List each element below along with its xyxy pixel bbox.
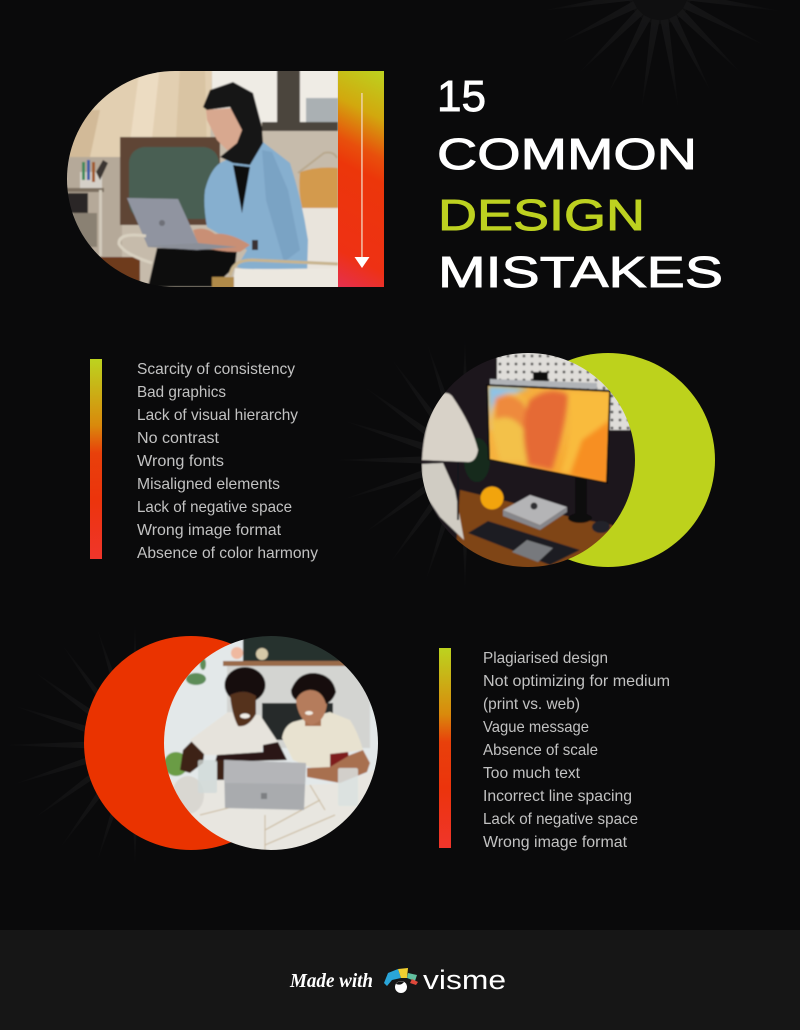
gradient bar with down arrow bbox=[338, 71, 384, 287]
face bbox=[206, 108, 245, 150]
arrow bbox=[354, 93, 370, 268]
visme logo icon bbox=[384, 968, 418, 993]
laptop bbox=[134, 216, 236, 252]
text block: first list: Wrong image format bbox=[137, 522, 282, 539]
tv bbox=[120, 137, 220, 225]
tiled wall bbox=[227, 666, 370, 748]
pegboard bbox=[497, 350, 630, 430]
text block: second list: Wrong image format bbox=[483, 834, 628, 851]
photo: two people at a laptop bbox=[160, 632, 385, 857]
cushion bbox=[299, 168, 338, 208]
title bbox=[437, 72, 723, 297]
title: MISTAKES bbox=[438, 248, 723, 297]
text block: second list: Not optimizing for medium bbox=[483, 673, 670, 690]
red circle bbox=[84, 636, 298, 850]
made with text: Made with bbox=[289, 970, 373, 992]
gradient bar: second list bbox=[439, 648, 451, 848]
monitor bbox=[485, 384, 613, 484]
keyboard bbox=[468, 521, 580, 565]
bed bbox=[300, 208, 340, 288]
text block: second list: (print vs. web) bbox=[483, 696, 580, 713]
hair bbox=[203, 82, 263, 165]
title: 15 bbox=[437, 72, 486, 121]
text block: first list: Lack of visual hierarchy bbox=[137, 407, 298, 424]
curtain bbox=[70, 71, 212, 158]
title: COMMON bbox=[437, 130, 697, 179]
text block: first list: Misaligned elements bbox=[137, 476, 280, 493]
plant bbox=[464, 438, 490, 482]
person left bbox=[180, 667, 287, 780]
text block: second list bbox=[483, 650, 670, 851]
starburst: middle bbox=[333, 338, 469, 592]
text block: second list: Absence of scale bbox=[483, 742, 598, 759]
text block: first list: No contrast bbox=[137, 430, 220, 447]
text block: second list: Plagiarised design bbox=[483, 650, 608, 667]
shirt bbox=[204, 142, 308, 280]
top shelf area bbox=[223, 634, 348, 666]
text block: first list: Wrong fonts bbox=[137, 453, 224, 470]
window bbox=[212, 65, 338, 131]
text block: first list: Bad graphics bbox=[137, 384, 226, 401]
photo: woman working on laptop bbox=[67, 71, 338, 287]
photo: desk with monitor bbox=[421, 353, 635, 567]
text block: second list: Incorrect line spacing bbox=[483, 788, 632, 805]
gradient bar: first list bbox=[90, 359, 102, 559]
text block: first list: Absence of color harmony bbox=[137, 545, 318, 562]
text block: second list: Lack of negative space bbox=[483, 811, 638, 828]
starburst: lower left bbox=[3, 623, 139, 867]
table bbox=[172, 771, 374, 850]
text block: first list bbox=[137, 361, 318, 562]
title: DESIGN bbox=[438, 191, 645, 240]
visme wordmark: visme bbox=[423, 965, 506, 995]
pants bbox=[148, 248, 237, 287]
orange ball bbox=[480, 486, 504, 510]
text block: second list: Vague message bbox=[483, 719, 589, 736]
monitor stand bbox=[568, 478, 592, 523]
person right bbox=[282, 673, 370, 783]
chair and fur bbox=[119, 235, 152, 263]
desk bbox=[456, 489, 613, 567]
shelf with pens bbox=[68, 159, 108, 256]
glasses bbox=[198, 760, 358, 806]
text block: first list: Lack of negative space bbox=[137, 499, 292, 516]
text block: second list: Too much text bbox=[483, 765, 581, 782]
mouse bbox=[592, 521, 610, 533]
mac mini bbox=[503, 495, 567, 530]
lime circle bbox=[501, 353, 715, 567]
laptop bbox=[224, 760, 306, 810]
white bag bbox=[172, 776, 204, 814]
leaves bbox=[164, 658, 206, 776]
starburst: top right bbox=[543, 0, 781, 109]
lamp shades bbox=[422, 393, 478, 540]
floor bbox=[100, 256, 141, 282]
fireplace bbox=[262, 703, 333, 740]
text block: first list: Scarcity of consistency bbox=[137, 361, 295, 378]
light bar bbox=[490, 372, 597, 389]
hands bbox=[193, 229, 250, 252]
footer bbox=[0, 930, 800, 1030]
